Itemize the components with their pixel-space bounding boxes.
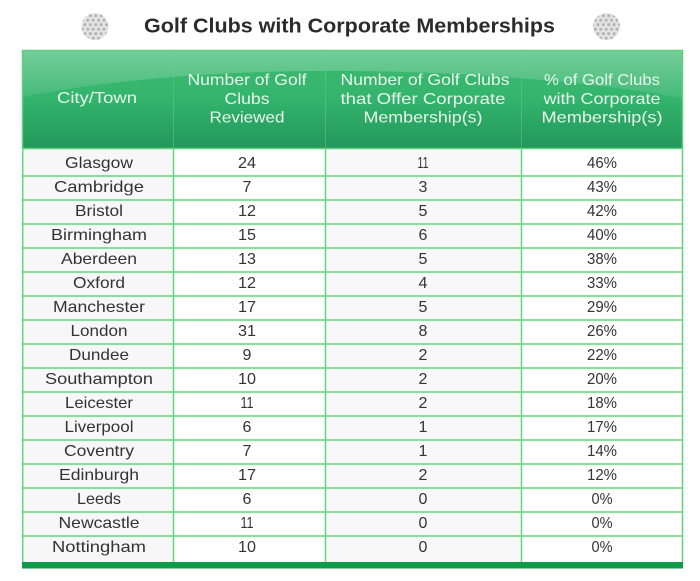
row: Edinburgh [59,467,617,484]
row: Birmingham: 15 [238,227,256,244]
row: Coventry: 14% [587,443,617,460]
row: Leicester [65,395,617,412]
row: Dundee: Dundee [69,347,129,364]
header: number offering corporate membership: Number of Golf Clubs [340,72,510,89]
row: Birmingham [51,227,617,244]
row: Glasgow: 11 [418,155,429,172]
row: Birmingham: Birmingham [51,227,147,244]
row: Glasgow: Glasgow [65,155,133,172]
row: Aberdeen: Aberdeen [61,251,137,268]
row: Bristol: Bristol [75,203,123,220]
header: number of golf clubs reviewed: Reviewed [210,110,284,126]
header: number of golf clubs reviewed: Clubs [224,91,270,108]
row: Leeds: 0 [419,491,428,508]
row: Oxford: 33% [587,275,617,292]
row: Newcastle: 11 [240,515,254,532]
header: percent with corporate membership: Membership(s) [542,110,662,126]
row: Leeds: 6 [243,491,252,508]
row: Oxford: 4 [419,275,428,292]
row: Glasgow [65,155,617,172]
row: Dundee: 2 [419,347,428,364]
row: Leeds: 0% [592,491,612,508]
icon: right golf ball [593,13,620,40]
row: Newcastle: Newcastle [58,515,140,532]
row: Oxford: Oxford [73,275,125,292]
row: Cambridge: 3 [419,179,428,196]
header: percent with corporate membership: % of Golf Clubs [544,72,660,89]
row: Bristol: 5 [419,203,428,220]
row: Bristol: 12 [238,203,256,220]
row: Birmingham: 40% [587,227,617,244]
row: Manchester [53,299,617,316]
row: Coventry: 7 [243,443,252,460]
row: Leicester: 11 [240,395,254,412]
header: number offering corporate membership: that Offer Corporate [340,91,506,108]
row: Edinburgh: 17 [238,467,256,484]
header: number offering corporate membership: Membership(s) [364,110,482,126]
table body background [22,148,683,563]
row: Cambridge: 43% [587,179,617,196]
row: Dundee: 22% [587,347,617,364]
header: number of golf clubs reviewed [188,72,307,126]
row: Aberdeen: 5 [419,251,428,268]
row: Leicester: 2 [419,395,428,412]
row: Leicester: 18% [587,395,617,412]
row: Liverpool [64,419,617,436]
row: Leeds: Leeds [77,491,121,508]
row: Dundee: 9 [243,347,252,364]
row: London [70,323,617,340]
row: Coventry: Coventry [64,443,134,460]
row: Glasgow: 46% [587,155,617,172]
row: Liverpool: 6 [243,419,252,436]
row: London: 26% [587,323,617,340]
header: percent with corporate membership: with Corporate [542,91,661,108]
row: London: London [70,323,128,340]
row: Southampton: 20% [587,371,617,388]
row: Aberdeen: 13 [238,251,256,268]
row: Manchester: Manchester [53,299,146,316]
row: Manchester: 29% [587,299,617,316]
row: Birmingham: 6 [419,227,428,244]
row: Liverpool: 1 [419,419,428,436]
row: Liverpool: Liverpool [64,419,134,436]
title: Golf Clubs with Corporate Memberships [144,16,555,38]
row: Edinburgh: 2 [419,467,428,484]
table grid lines [22,148,683,563]
row: Newcastle: 0 [419,515,428,532]
row: Bristol [75,203,617,220]
row: Coventry [64,443,617,460]
row: Nottingham: 0 [419,539,428,556]
row: Coventry: 1 [419,443,428,460]
header: city/town: City/Town [57,90,137,107]
row: Liverpool: 17% [587,419,617,436]
row: Southampton: Southampton [45,371,153,388]
row: Newcastle [58,515,612,532]
row: Aberdeen: 38% [587,251,617,268]
row: Manchester: 17 [238,299,256,316]
row: Nottingham [52,539,612,556]
row: Glasgow: 24 [238,155,256,172]
header: number of golf clubs reviewed: Number of Golf [188,72,307,89]
row: Cambridge: Cambridge [54,179,144,196]
row: Cambridge [54,179,617,196]
row: Southampton: 2 [419,371,428,388]
header: number offering corporate membership [340,72,510,126]
table footer bar [22,562,683,568]
row: Nottingham: Nottingham [52,539,146,556]
row: Leicester: Leicester [65,395,134,412]
row: London: 31 [238,323,256,340]
icon: left golf ball [82,13,108,40]
row: Dundee [69,347,617,364]
row: Bristol: 42% [587,203,617,220]
row: Leeds [77,491,612,508]
row: Southampton: 10 [238,371,256,388]
row: Newcastle: 0% [592,515,612,532]
row: Nottingham: 10 [238,539,256,556]
row: Edinburgh: Edinburgh [59,467,139,484]
row: Manchester: 5 [419,299,428,316]
row: Nottingham: 0% [592,539,612,556]
row: Oxford [73,275,617,292]
row: Edinburgh: 12% [587,467,617,484]
table header band [22,50,683,148]
row: London: 8 [419,323,428,340]
row: Aberdeen [61,251,617,268]
header: percent with corporate membership [542,72,662,126]
row: Oxford: 12 [238,275,256,292]
row: Southampton [45,371,617,388]
row: Cambridge: 7 [243,179,252,196]
